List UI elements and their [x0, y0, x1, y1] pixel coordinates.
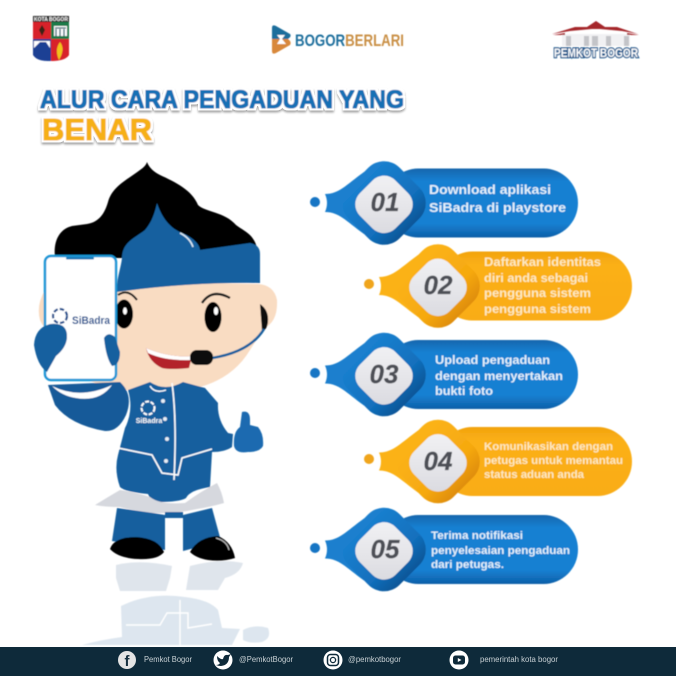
title: BENAR	[42, 112, 152, 147]
uniform trim	[118, 383, 212, 480]
ears and head	[39, 280, 277, 392]
icon: youtube	[450, 650, 468, 670]
logo: Kota Bogor shield	[33, 16, 69, 61]
mascot reflection	[82, 561, 269, 645]
icon: facebook: f	[124, 653, 130, 670]
youtube label: pemerintah kota bogor	[480, 655, 558, 664]
phone	[45, 256, 116, 380]
step 04	[364, 411, 632, 512]
cuff	[52, 385, 112, 399]
title: ALUR CARA PENGADUAN YANG	[40, 86, 404, 114]
step text: dari petugas.	[431, 559, 504, 571]
uniform logo: SiBadra	[136, 418, 162, 425]
step text: dengan menyertakan	[435, 371, 563, 383]
twitter label: @PemkotBogor	[239, 655, 293, 664]
step text: status aduan anda	[484, 469, 585, 481]
icon: instagram	[324, 650, 342, 670]
facebook label: Pemkot Bogor	[144, 655, 192, 664]
right fingers	[104, 334, 120, 366]
logo: Kota Bogor shield: KOTA BOGOR	[34, 17, 68, 23]
logo: Bogor Berlari	[272, 25, 404, 54]
mascot	[34, 162, 277, 561]
number: 03	[370, 359, 399, 389]
pill and diamond badge	[325, 499, 578, 600]
step text: pengguna sistem	[484, 288, 591, 300]
right eye	[204, 302, 222, 332]
headband	[117, 203, 260, 292]
pill and diamond badge	[379, 411, 632, 512]
thumbs up hand	[234, 412, 263, 452]
body	[116, 382, 233, 502]
icon: Bogor Berlari mark	[272, 25, 291, 54]
connector dot	[310, 543, 320, 553]
pill and diamond badge	[325, 324, 578, 425]
step text: bukti foto	[435, 386, 493, 398]
step text: petugas untuk memantau	[484, 455, 623, 467]
headset	[260, 304, 268, 331]
number: 01	[371, 187, 399, 217]
step text: pengguna sistem	[484, 304, 591, 316]
step text: Terima notifikasi	[431, 530, 523, 542]
step text: Upload pengaduan	[435, 355, 550, 367]
number: 05	[371, 534, 400, 564]
connector dot	[310, 197, 320, 207]
step text: diri anda sebagai	[484, 273, 588, 285]
uniform logo	[136, 402, 162, 425]
step text: penyelesaian pengaduan	[431, 545, 570, 557]
hair	[55, 162, 258, 258]
step text: Download aplikasi	[429, 182, 551, 197]
legs	[112, 508, 221, 551]
left shoe	[110, 537, 164, 559]
pill and diamond badge	[379, 235, 632, 337]
step 02	[364, 235, 632, 337]
mouth	[146, 348, 192, 369]
step text: Daftarkan identitas	[484, 257, 601, 269]
number: 04	[424, 446, 453, 476]
step text: Komunikasikan dengan	[484, 441, 613, 453]
wordmark: PEMKOT BOGOR	[554, 46, 638, 60]
app logo: SiBadra	[72, 315, 111, 327]
footer bar	[0, 647, 676, 676]
title	[40, 86, 404, 147]
step 05	[310, 499, 578, 600]
step text: SiBadra di playstore	[429, 200, 566, 215]
number: 02	[424, 270, 453, 300]
logo: Pemkot Bogor	[552, 21, 639, 60]
step 01	[310, 152, 578, 254]
left eyebrow	[118, 292, 137, 300]
wordmark: BOGORBERLARI	[295, 31, 404, 50]
right shoe	[190, 536, 235, 561]
right eyebrow	[202, 294, 230, 303]
icon: facebook	[118, 651, 136, 670]
left hand	[34, 324, 67, 372]
cloth sash	[95, 483, 224, 513]
connector dot	[364, 279, 374, 289]
sleeve	[48, 382, 129, 431]
connector dot	[364, 454, 374, 464]
instagram label: @pemkotbogor	[348, 655, 401, 664]
headband highlight	[180, 233, 193, 247]
icon: twitter	[214, 650, 232, 670]
pill and diamond badge	[325, 152, 578, 254]
connector dot	[310, 368, 320, 378]
step 03	[310, 324, 578, 425]
left eye	[115, 300, 133, 328]
